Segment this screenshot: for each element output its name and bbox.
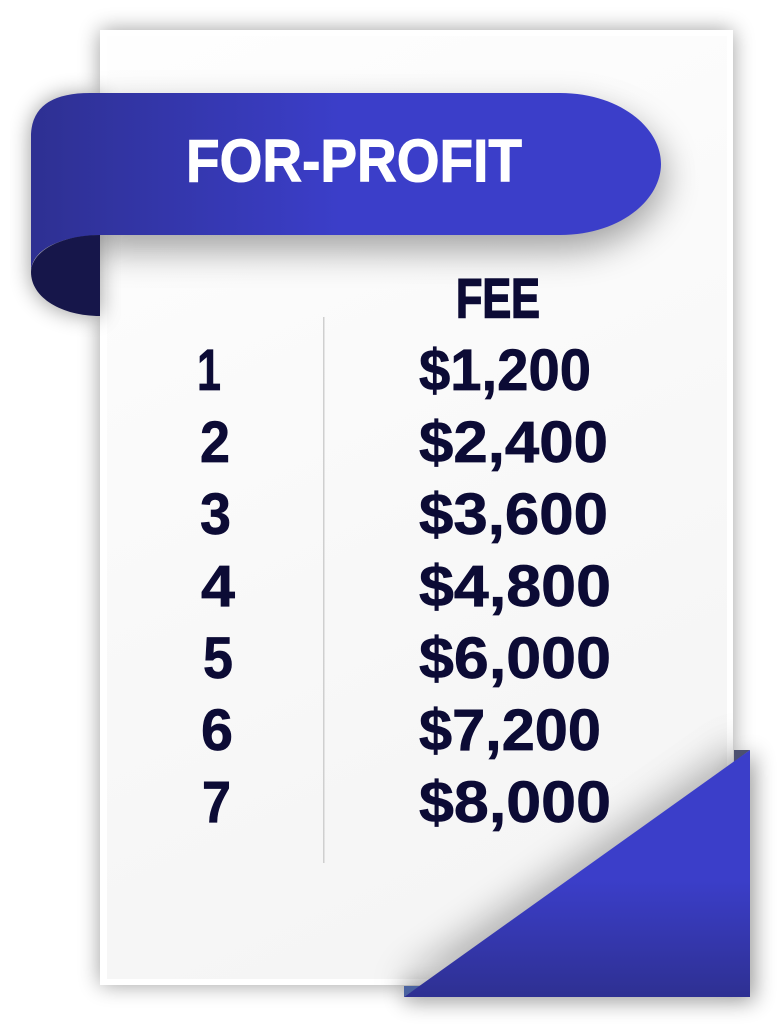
row numbers: 5	[203, 626, 233, 691]
shadow outside the corner	[404, 750, 754, 1001]
column divider	[323, 317, 324, 863]
fee values: $4,800	[419, 554, 611, 619]
panel: paper sheet	[100, 30, 733, 985]
corner triangle	[404, 750, 750, 997]
title: FOR-PROFIT	[186, 128, 522, 194]
fold tab top right	[734, 750, 750, 762]
row numbers: 6	[201, 698, 233, 763]
row numbers: 1	[197, 338, 221, 403]
fee values: $3,600	[419, 482, 608, 547]
row numbers: 7	[202, 770, 231, 835]
row numbers: 2	[200, 410, 230, 475]
fee values	[419, 338, 611, 835]
fee values: $1,200	[419, 338, 591, 403]
ribbon and fold shadows on the paper	[90, 108, 748, 985]
fee values: $6,000	[419, 626, 611, 691]
ribbon banner	[31, 93, 661, 316]
triangle	[404, 750, 750, 997]
row numbers: 3	[200, 482, 231, 547]
fee values: $8,000	[419, 770, 611, 835]
ribbon band	[31, 93, 661, 272]
shadow outside the ribbon	[31, 95, 100, 316]
column heading: fee: FEE	[456, 266, 540, 330]
fee values: $2,400	[419, 410, 608, 475]
ribbon fold underside	[31, 235, 100, 316]
row numbers: 4	[201, 554, 235, 619]
fee values: $7,200	[419, 698, 601, 763]
fold tab bottom left	[404, 986, 420, 997]
row numbers	[197, 338, 235, 835]
